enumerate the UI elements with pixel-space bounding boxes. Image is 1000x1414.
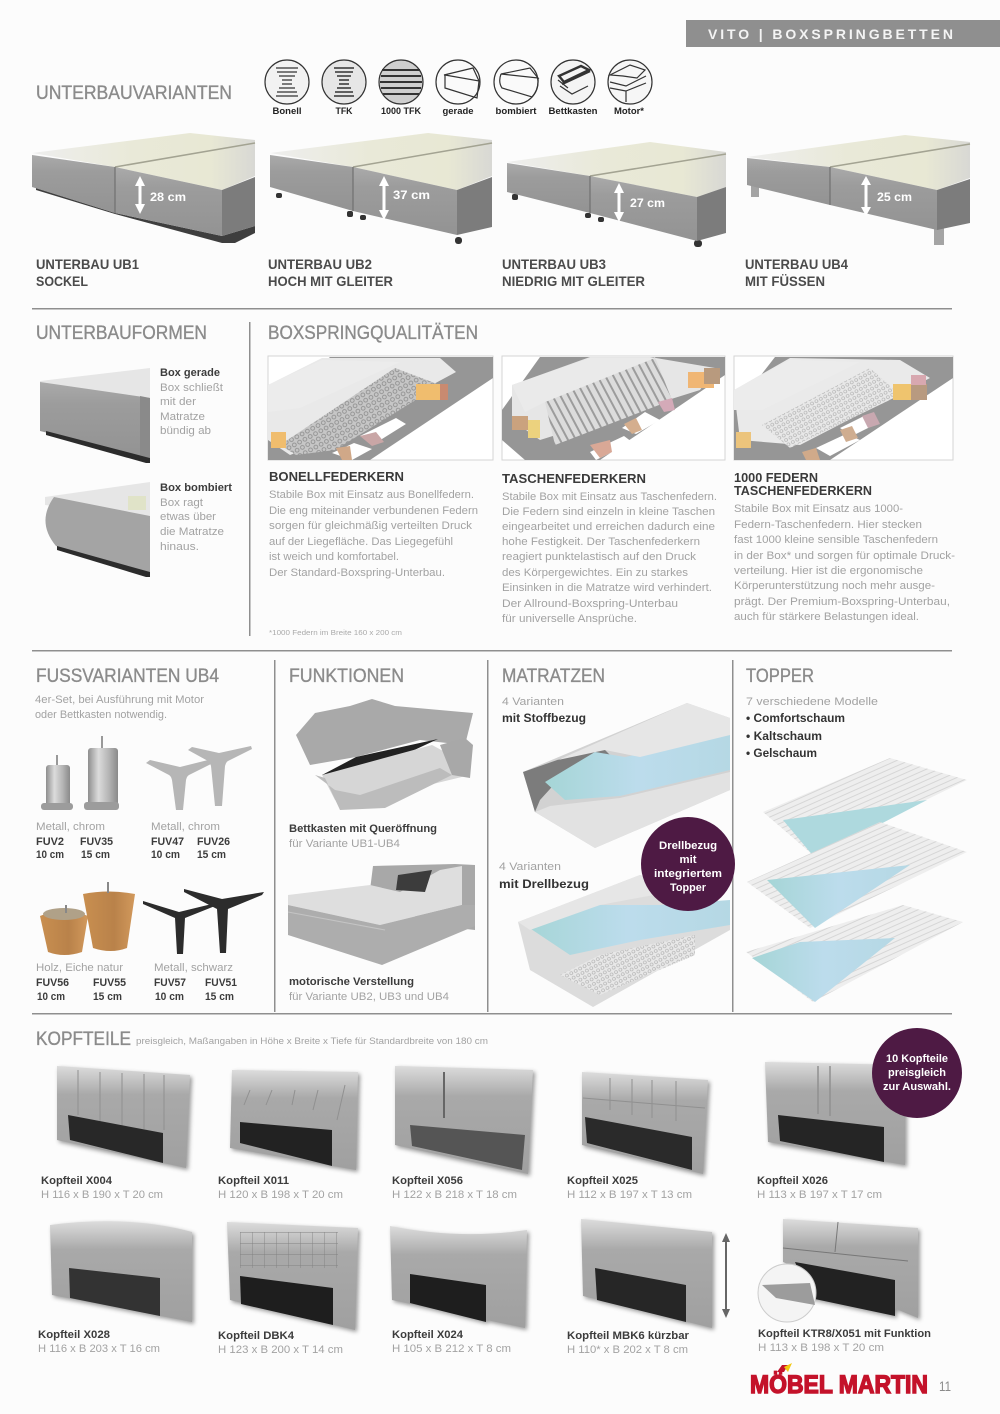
headboard: X004: Kopfteil X004 bbox=[41, 1175, 113, 1187]
text: black feet: FUV57 bbox=[154, 977, 186, 989]
badge: Drellbezug: Drellbezug bbox=[659, 840, 717, 852]
text: chrome feet 2: FUV26 bbox=[197, 836, 230, 848]
image: bed with storage box bbox=[296, 699, 473, 810]
text: TASCHENFEDERKERN bbox=[502, 471, 646, 486]
text bbox=[289, 823, 437, 850]
text: Box gerade: Matratze bbox=[160, 411, 205, 423]
text: sorgen für gleichmäßig verteilten Druck bbox=[269, 520, 473, 532]
section header bar: VITO | BOXSPRINGBETTEN bbox=[708, 26, 953, 42]
headboard: X011: H 120 x B 198 x T 20 cm bbox=[218, 1189, 343, 1201]
text: Box bombiert: hinaus. bbox=[160, 541, 199, 553]
product: Unterbau UB4 bbox=[745, 135, 970, 289]
feature icons row bbox=[265, 60, 652, 116]
text: black feet: 15 cm bbox=[205, 991, 234, 1003]
text: chrome feet 1 bbox=[36, 821, 113, 861]
headboard: KTR8/X051: Kopfteil KTR8/X051 mit Funktion bbox=[758, 1328, 931, 1340]
headboard: X011: Kopfteil X011 bbox=[218, 1175, 289, 1187]
headboard: X025: Kopfteil X025 bbox=[567, 1175, 638, 1187]
text: BONELLFEDERKERN bbox=[269, 469, 404, 484]
panel: Bonellfederkern bbox=[268, 356, 493, 637]
product: Unterbau UB4: 25 cm bbox=[877, 190, 912, 204]
text: Stabile Box mit Einsatz aus 1000- bbox=[734, 503, 903, 515]
text: chrome feet 1: Metall, chrom bbox=[36, 821, 105, 833]
badge: Drellbezug: Topper bbox=[670, 882, 707, 894]
intro text bbox=[35, 694, 204, 721]
text: Stoffbezug: mit Stoffbezug bbox=[502, 711, 586, 725]
text: Drellbezug bbox=[499, 861, 589, 891]
page number: 11 bbox=[939, 1378, 951, 1394]
badge: Drellbezug: mit bbox=[680, 854, 697, 866]
icon: gerade: gerade bbox=[442, 106, 474, 116]
image: motorised bed bbox=[288, 864, 475, 965]
text: Box gerade: Box gerade bbox=[160, 367, 220, 379]
text: black feet: 10 cm bbox=[155, 991, 184, 1003]
text: prägt. Der Premium-Boxspring-Unterbau, bbox=[734, 596, 950, 608]
badge: 10 Kopfteile: zur Auswahl. bbox=[883, 1081, 951, 1093]
product: Unterbau UB3 bbox=[502, 142, 726, 289]
arrow: height bbox=[135, 176, 145, 214]
headboard: X024: Kopfteil X024 bbox=[392, 1329, 464, 1341]
text: Einsinken in die Matratze wird verhindert. bbox=[502, 582, 712, 594]
headboard: X024: H 105 x B 212 x T 8 cm bbox=[392, 1343, 511, 1355]
headboard: X056: H 122 x B 218 x T 18 cm bbox=[392, 1189, 517, 1201]
text: Der Standard-Boxspring-Unterbau. bbox=[269, 567, 445, 579]
text: black feet: Metall, schwarz bbox=[154, 962, 233, 974]
text: chrome feet 2: 15 cm bbox=[197, 849, 226, 861]
icon: Bettkasten: Bettkasten bbox=[548, 106, 598, 116]
text: Der Allround-Boxspring-Unterbau bbox=[502, 598, 678, 610]
headboard: KTR8/X051 bbox=[758, 1219, 931, 1354]
text: wood feet: Holz, Eiche natur bbox=[36, 962, 123, 974]
text: für Variante UB1-UB4 bbox=[289, 838, 400, 850]
inset circle bbox=[758, 1264, 816, 1322]
text: chrome feet 2 bbox=[151, 821, 230, 861]
headboard: X028 bbox=[38, 1221, 192, 1355]
badge: Drellbezug bbox=[641, 817, 735, 911]
text: Box gerade: bündig ab bbox=[160, 425, 211, 437]
text: Federn-Taschenfedern. Hier stecken bbox=[734, 519, 922, 531]
icon: Motor bbox=[608, 60, 652, 116]
headboard: DBK4: H 123 x B 200 x T 14 cm bbox=[218, 1344, 343, 1356]
headboard: DBK4 bbox=[218, 1222, 358, 1356]
headboard: X026 bbox=[757, 1062, 905, 1201]
text: Box bombiert: etwas über bbox=[160, 511, 216, 523]
text: models: • Comfortschaum bbox=[746, 711, 845, 725]
text: chrome feet 2: 10 cm bbox=[151, 849, 180, 861]
text: verteilung. Hier ist die ergonomische bbox=[734, 565, 923, 577]
product: Unterbau UB4: UNTERBAU UB4 bbox=[745, 256, 848, 272]
product: Unterbau UB2: HOCH MIT GLEITER bbox=[268, 273, 393, 289]
text bbox=[734, 470, 955, 623]
image: pocket spring cutaway bbox=[502, 356, 725, 460]
icon: bombiert: bombiert bbox=[496, 106, 536, 116]
badge: Drellbezug: integriertem bbox=[654, 868, 722, 880]
product: Unterbau UB2: 37 cm bbox=[393, 188, 430, 202]
headboard: MBK6 bbox=[567, 1219, 730, 1356]
headboard: X004: H 116 x B 190 x T 20 cm bbox=[41, 1189, 163, 1201]
text: Bettkasten mit Queröffnung bbox=[289, 823, 437, 835]
arrow: height bbox=[861, 176, 871, 216]
text: in der Box* und sorgen für optimale Druck- bbox=[734, 550, 955, 562]
text: Box bombiert bbox=[160, 482, 232, 553]
text: wood feet: FUV55 bbox=[93, 977, 126, 989]
headboard: X026: H 113 x B 197 x T 17 cm bbox=[757, 1189, 882, 1201]
text: motorische Verstellung bbox=[289, 976, 414, 988]
text: models bbox=[746, 696, 878, 760]
product: Unterbau UB3: NIEDRIG MIT GLEITER bbox=[502, 273, 645, 289]
headboard: X056: Kopfteil X056 bbox=[392, 1175, 463, 1187]
heading: Kopfteile bbox=[36, 1029, 488, 1050]
panel: Matratzen bbox=[499, 666, 735, 1007]
icon: Bettkasten bbox=[548, 60, 598, 116]
product: Unterbau UB1: SOCKEL bbox=[36, 273, 88, 289]
icon: bombiert bbox=[494, 60, 538, 116]
headboard: X025 bbox=[567, 1072, 708, 1201]
text bbox=[269, 469, 478, 579]
text: chrome feet 1: FUV35 bbox=[80, 836, 113, 848]
headboard: X056 bbox=[392, 1066, 533, 1201]
icon: chrome Y feet bbox=[146, 746, 252, 810]
heading: Boxspringqualitäten: BOXSPRINGQUALITÄTEN bbox=[268, 323, 478, 344]
text: wood feet bbox=[36, 962, 126, 1003]
heading: UNTERBAUFORMEN bbox=[36, 323, 207, 344]
icon: black feet bbox=[143, 889, 264, 954]
headboard: MBK6: Kopfteil MBK6 kürzbar bbox=[567, 1330, 690, 1342]
text: Stoffbezug: 4 Varianten bbox=[502, 696, 564, 708]
headboard: X011 bbox=[218, 1070, 358, 1201]
heading: Kopfteile: preisgleich, Maßangaben in Höhe x Breite x Tiefe für Standardbreite von 180 cm bbox=[136, 1036, 488, 1046]
heading: FUSSVARIANTEN UB4 bbox=[36, 666, 219, 687]
badge: 10 Kopfteile bbox=[872, 1028, 962, 1118]
icon: wood feet bbox=[40, 882, 135, 955]
text: des Körpergewichtes. Ein zu starkes bbox=[502, 567, 689, 579]
panel: Unterbauformen bbox=[36, 323, 232, 577]
panel: 1000 Federn Taschenfederkern bbox=[734, 356, 955, 623]
text: Drellbezug: 4 Varianten bbox=[499, 861, 561, 873]
icon: chrome cylinder feet bbox=[41, 736, 119, 810]
heading: Kopfteile: KOPFTEILE bbox=[36, 1029, 131, 1050]
image: Box bombiert bbox=[45, 482, 150, 577]
text: hohe Festigkeit. Der Taschenfederkern bbox=[502, 536, 700, 548]
logo: Möbel Martin: MÖBEL MARTIN bbox=[750, 1370, 928, 1399]
icon: Bonell bbox=[265, 60, 309, 116]
headboard: X004 bbox=[41, 1066, 190, 1201]
text: für Variante UB2, UB3 und UB4 bbox=[289, 991, 449, 1003]
text: Box gerade: mit der bbox=[160, 396, 196, 408]
text: Box bombiert: Box ragt bbox=[160, 497, 203, 509]
text bbox=[289, 976, 449, 1003]
icon: Bonell: Bonell bbox=[272, 106, 302, 116]
text: eingearbeitet und erreichen dadurch eine bbox=[502, 521, 715, 533]
text: models: 7 verschiedene Modelle bbox=[746, 696, 878, 708]
text: auf der Liegefläche. Das Liegegefühl bbox=[269, 536, 453, 548]
image: Box gerade bbox=[40, 368, 150, 463]
text: TASCHENFEDERKERN bbox=[734, 483, 872, 498]
text: fast 1000 kleine sensible Taschenfedern bbox=[734, 534, 938, 546]
text: wood feet: 10 cm bbox=[37, 991, 65, 1003]
product: Unterbau UB1 bbox=[32, 133, 255, 289]
product: Unterbau UB1: 28 cm bbox=[150, 190, 186, 204]
headboard: X028: Kopfteil X028 bbox=[38, 1329, 110, 1341]
section header bar bbox=[686, 20, 1000, 47]
image: mattress with fabric cover bbox=[523, 703, 730, 848]
icon: Motor: Motor* bbox=[614, 106, 645, 116]
icon: 1000 TFK bbox=[379, 60, 423, 116]
text: auch für stärkere Belastungen ideal. bbox=[734, 611, 919, 623]
text: Box gerade: Box schließt bbox=[160, 382, 223, 394]
text: models: • Kaltschaum bbox=[746, 729, 822, 743]
icon: TFK bbox=[322, 60, 366, 116]
text: Stabile Box mit Einsatz aus Taschenfedern. bbox=[502, 491, 717, 503]
icon: gerade bbox=[436, 60, 480, 116]
headboard: DBK4: Kopfteil DBK4 bbox=[218, 1330, 295, 1342]
text: black feet: FUV51 bbox=[205, 977, 237, 989]
panel: Funktionen bbox=[288, 666, 475, 1003]
panel: Fussvarianten UB4 bbox=[35, 666, 264, 1003]
text: Drellbezug: mit Drellbezug bbox=[499, 877, 589, 891]
heading: TOPPER bbox=[746, 666, 814, 687]
text: chrome feet 1: 15 cm bbox=[81, 849, 110, 861]
text: Stabile Box mit Einsatz aus Bonellfedern. bbox=[269, 489, 474, 501]
arrow: height bbox=[614, 183, 624, 222]
panel: Taschenfederkern bbox=[502, 356, 725, 625]
text bbox=[502, 471, 717, 625]
arrow: height adjustable bbox=[722, 1233, 730, 1318]
panel: Topper bbox=[746, 666, 967, 1002]
product: Unterbau UB4: MIT FÜSSEN bbox=[745, 273, 825, 289]
headboard: X028: H 116 x B 203 x T 16 cm bbox=[38, 1343, 160, 1355]
text: models: • Gelschaum bbox=[746, 746, 817, 760]
text: chrome feet 1: 10 cm bbox=[36, 849, 64, 861]
heading: MATRATZEN bbox=[502, 666, 605, 687]
text: wood feet: 15 cm bbox=[93, 991, 122, 1003]
text: black feet bbox=[154, 962, 237, 1003]
product: Unterbau UB1: UNTERBAU UB1 bbox=[36, 256, 139, 272]
text: chrome feet 2: FUV47 bbox=[151, 836, 184, 848]
badge: 10 Kopfteile: 10 Kopfteile bbox=[886, 1053, 948, 1065]
icon: TFK: TFK bbox=[336, 106, 353, 116]
icon: 1000 TFK: 1000 TFK bbox=[381, 106, 421, 116]
text: für universelle Ansprüche. bbox=[502, 613, 637, 625]
text: Box gerade bbox=[160, 367, 223, 437]
product: Unterbau UB2 bbox=[268, 133, 492, 289]
image: 1000 spring cutaway bbox=[734, 356, 953, 460]
footnote: *1000 Federn im Breite 160 x 200 cm bbox=[269, 630, 402, 637]
product: Unterbau UB2: UNTERBAU UB2 bbox=[268, 256, 372, 272]
image: mattress with ticking cover bbox=[518, 875, 730, 1007]
badge: 10 Kopfteile: preisgleich bbox=[888, 1067, 946, 1079]
text: Stoffbezug bbox=[502, 696, 586, 725]
image: topper stack bbox=[746, 758, 967, 1002]
text: Box bombiert: Box bombiert bbox=[160, 482, 232, 494]
text: ist weich und komfortabel. bbox=[269, 551, 399, 563]
text: Die Federn sind einzeln in kleine Taschen bbox=[502, 506, 715, 518]
text: chrome feet 2: Metall, chrom bbox=[151, 821, 220, 833]
intro text: oder Bettkasten notwendig. bbox=[35, 709, 167, 721]
text: 1000 FEDERN bbox=[734, 470, 818, 485]
headboard: MBK6: H 110* x B 202 x T 8 cm bbox=[567, 1344, 688, 1356]
image: Bonell cutaway bbox=[268, 356, 493, 460]
heading: FUNKTIONEN bbox=[289, 666, 404, 687]
headboard: X026: Kopfteil X026 bbox=[757, 1175, 828, 1187]
product: Unterbau UB3: UNTERBAU UB3 bbox=[502, 256, 606, 272]
text: Box bombiert: die Matratze bbox=[160, 526, 224, 538]
product: Unterbau UB3: 27 cm bbox=[630, 196, 665, 210]
text: Die eng miteinander verbundenen Federn bbox=[269, 505, 478, 517]
headboard: X024 bbox=[390, 1226, 527, 1355]
heading: Unterbauvarianten: UNTERBAUVARIANTEN bbox=[36, 83, 232, 104]
text: wood feet: FUV56 bbox=[36, 977, 69, 989]
headboard: X025: H 112 x B 197 x T 13 cm bbox=[567, 1189, 692, 1201]
text: Körperunterstützung noch mehr ausge- bbox=[734, 580, 935, 592]
arrow: height bbox=[379, 176, 389, 220]
headboard: KTR8/X051: H 113 x B 198 x T 20 cm bbox=[758, 1342, 884, 1354]
text: reagiert punktelastisch auf den Druck bbox=[502, 551, 697, 563]
text: chrome feet 1: FUV2 bbox=[36, 836, 64, 848]
intro text: 4er-Set, bei Ausführung mit Motor bbox=[35, 694, 204, 706]
